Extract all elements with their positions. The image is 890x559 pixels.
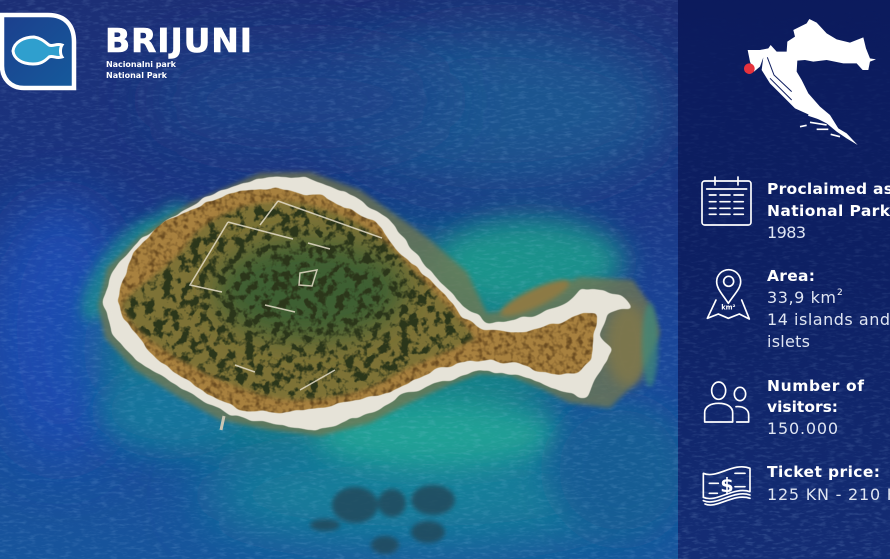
stat: area (707, 267, 890, 351)
shallow rocky shelf around island (98, 172, 660, 436)
icon: map pin: km² (721, 304, 736, 312)
vegetation (121, 198, 476, 402)
stone walls (190, 201, 382, 390)
land (118, 187, 598, 414)
title: Brijuni wordmark (105, 21, 252, 80)
underwater rocks (310, 485, 455, 554)
text: proclaimed as national park 1983: National Park (767, 202, 890, 220)
icon: calendar (702, 177, 751, 225)
icon: people (705, 382, 749, 422)
text: visitors (767, 377, 864, 438)
icon: banknote: $ (720, 474, 734, 497)
map of Croatia with location marker (744, 19, 876, 145)
icon: fish (13, 37, 62, 64)
text: proclaimed as national park 1983: Proclaimed as (767, 180, 890, 198)
panel: facts sidebar (678, 0, 890, 559)
icon: map pin (707, 270, 749, 319)
text: area values: 2 (837, 288, 843, 298)
text: area values: Area: (767, 267, 815, 285)
logo: fish badge (2, 15, 74, 88)
text: visitors: Number of (767, 377, 864, 395)
text: area values: 14 islands and (767, 310, 890, 329)
stat: visitors (705, 377, 864, 438)
text: ticket price (767, 463, 890, 504)
text: proclaimed as national park 1983 (767, 180, 890, 242)
title: Brijuni wordmark: National Park (106, 71, 168, 80)
jetty (221, 416, 224, 430)
title: Brijuni wordmark: BRIJUNI (105, 21, 252, 60)
text: area values: islets (767, 332, 810, 351)
text: area values: 33,9 km (767, 288, 836, 307)
text: ticket price: Ticket price: (767, 463, 880, 481)
text: proclaimed as national park 1983: 1983 (767, 223, 806, 242)
icon: banknote (703, 467, 750, 505)
stat: ticket price (703, 463, 890, 505)
island: fish shape (98, 170, 660, 436)
text: area values (767, 267, 890, 351)
stat: proclaimed (702, 177, 890, 242)
white shoreline (103, 178, 633, 431)
text: visitors: 150.000 (767, 419, 838, 438)
text: visitors: visitors: (767, 398, 838, 416)
title: Brijuni wordmark: Nacionalni park (106, 60, 177, 69)
